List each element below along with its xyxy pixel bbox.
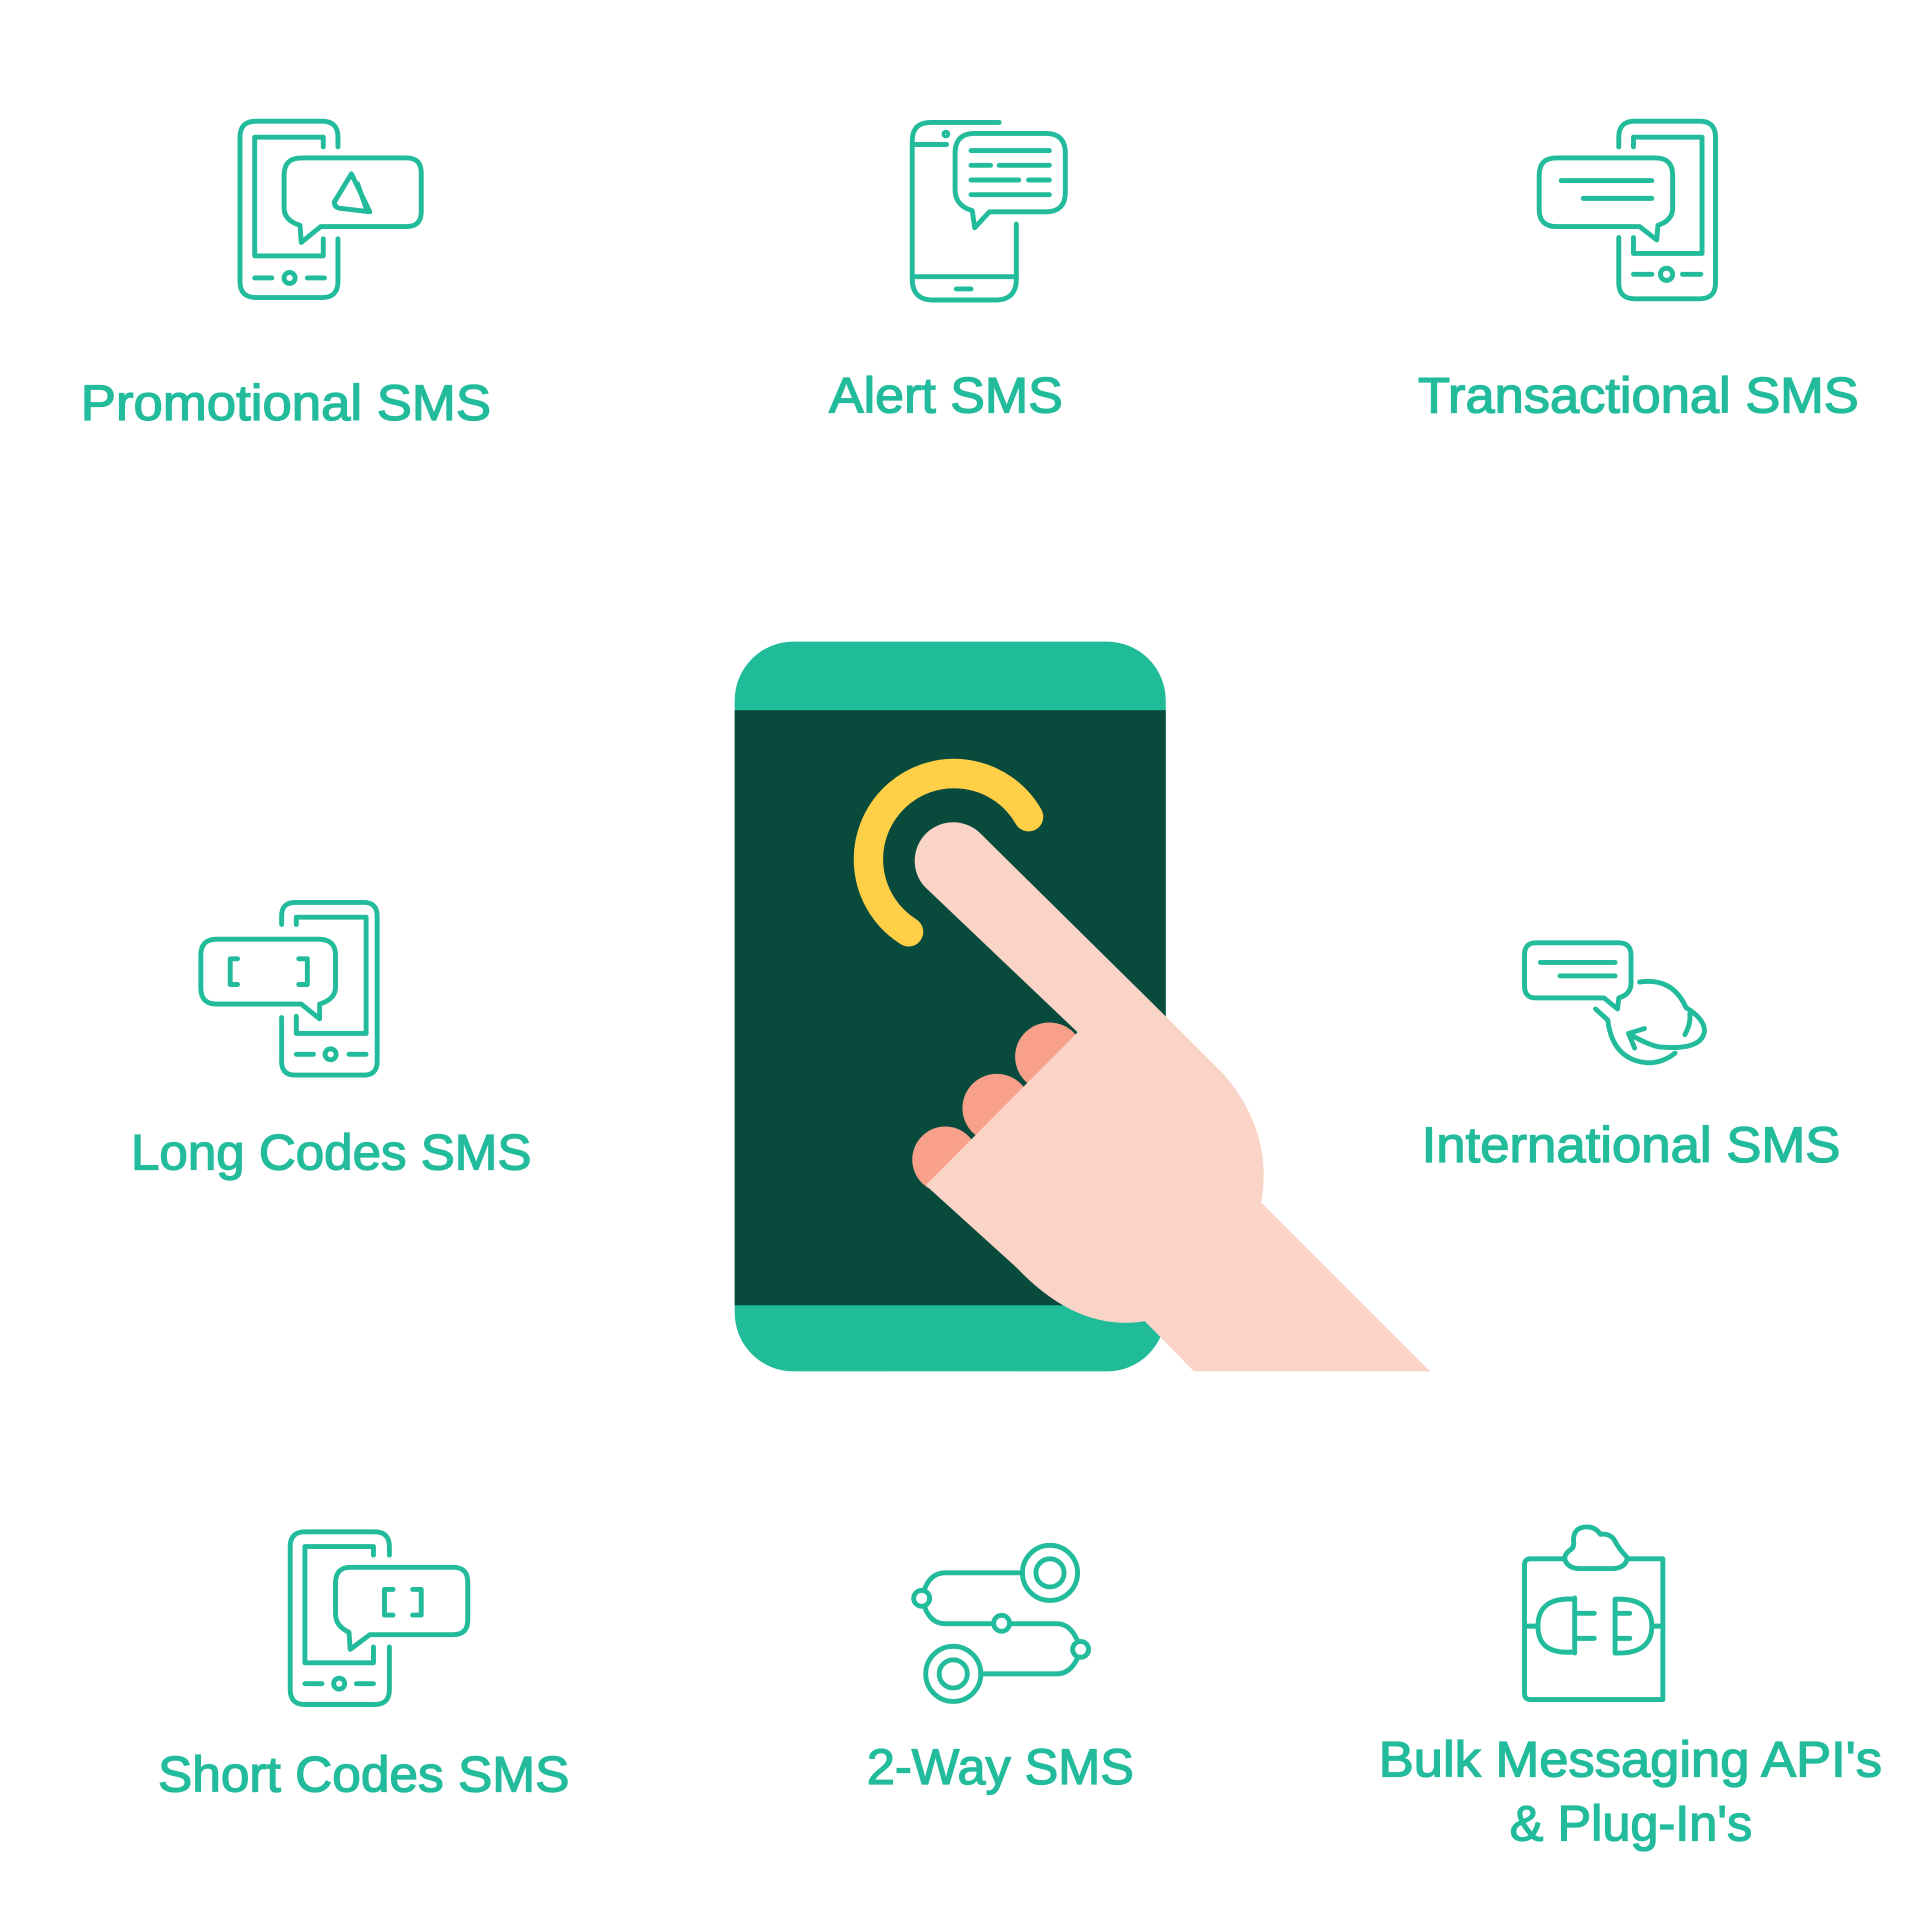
label: Alert SMS: Alert SMS [829,368,1063,424]
label: Transactional SMS: Transactional SMS [1418,368,1859,424]
finger knuckles [912,1022,1084,1193]
label: Long Codes SMS: Long Codes SMS [131,1124,531,1180]
icon: winding route with nodes [914,1545,1089,1701]
touch ripple arc [868,774,1029,932]
label: Bulk Messaging API's & Plug-In's: & Plug-In's [1510,1795,1752,1851]
panel: Bulk Messaging API's & Plug-In's [1379,1527,1882,1851]
panel: Transactional SMS [1418,121,1859,424]
label: Bulk Messaging API's & Plug-In's [1379,1732,1882,1851]
label: Bulk Messaging API's & Plug-In's: Bulk Messaging API's [1379,1732,1882,1788]
panel: 2-Way SMS [867,1545,1134,1795]
icon: phone with message bubble on the left [1539,121,1716,299]
panel: central phone with hand [735,642,1430,1371]
panel: Alert SMS [829,122,1065,424]
panel: International SMS [1422,943,1840,1173]
phone screen [735,710,1166,1305]
icon: phone with bracket bubble on the left [201,902,377,1075]
panel: Short Codes SMS [158,1532,569,1802]
panel: Promotional SMS [81,121,491,431]
hand [915,822,1430,1371]
icon: phone with text bubble [912,122,1065,300]
icon: bubble and globe with orbit arrow [1524,943,1704,1063]
label: Promotional SMS: Promotional SMS [81,375,491,431]
icon: phone with promotional bubble [240,121,421,298]
icon: plug and socket with cloud [1524,1527,1663,1700]
panel: Long Codes SMS [131,902,531,1180]
phone body [735,642,1166,1371]
label: Short Codes SMS: Short Codes SMS [158,1746,569,1802]
icon: phone with bracket bubble on the right [290,1532,468,1704]
label: 2-Way SMS: 2-Way SMS [867,1739,1134,1795]
label: International SMS: International SMS [1422,1117,1840,1173]
